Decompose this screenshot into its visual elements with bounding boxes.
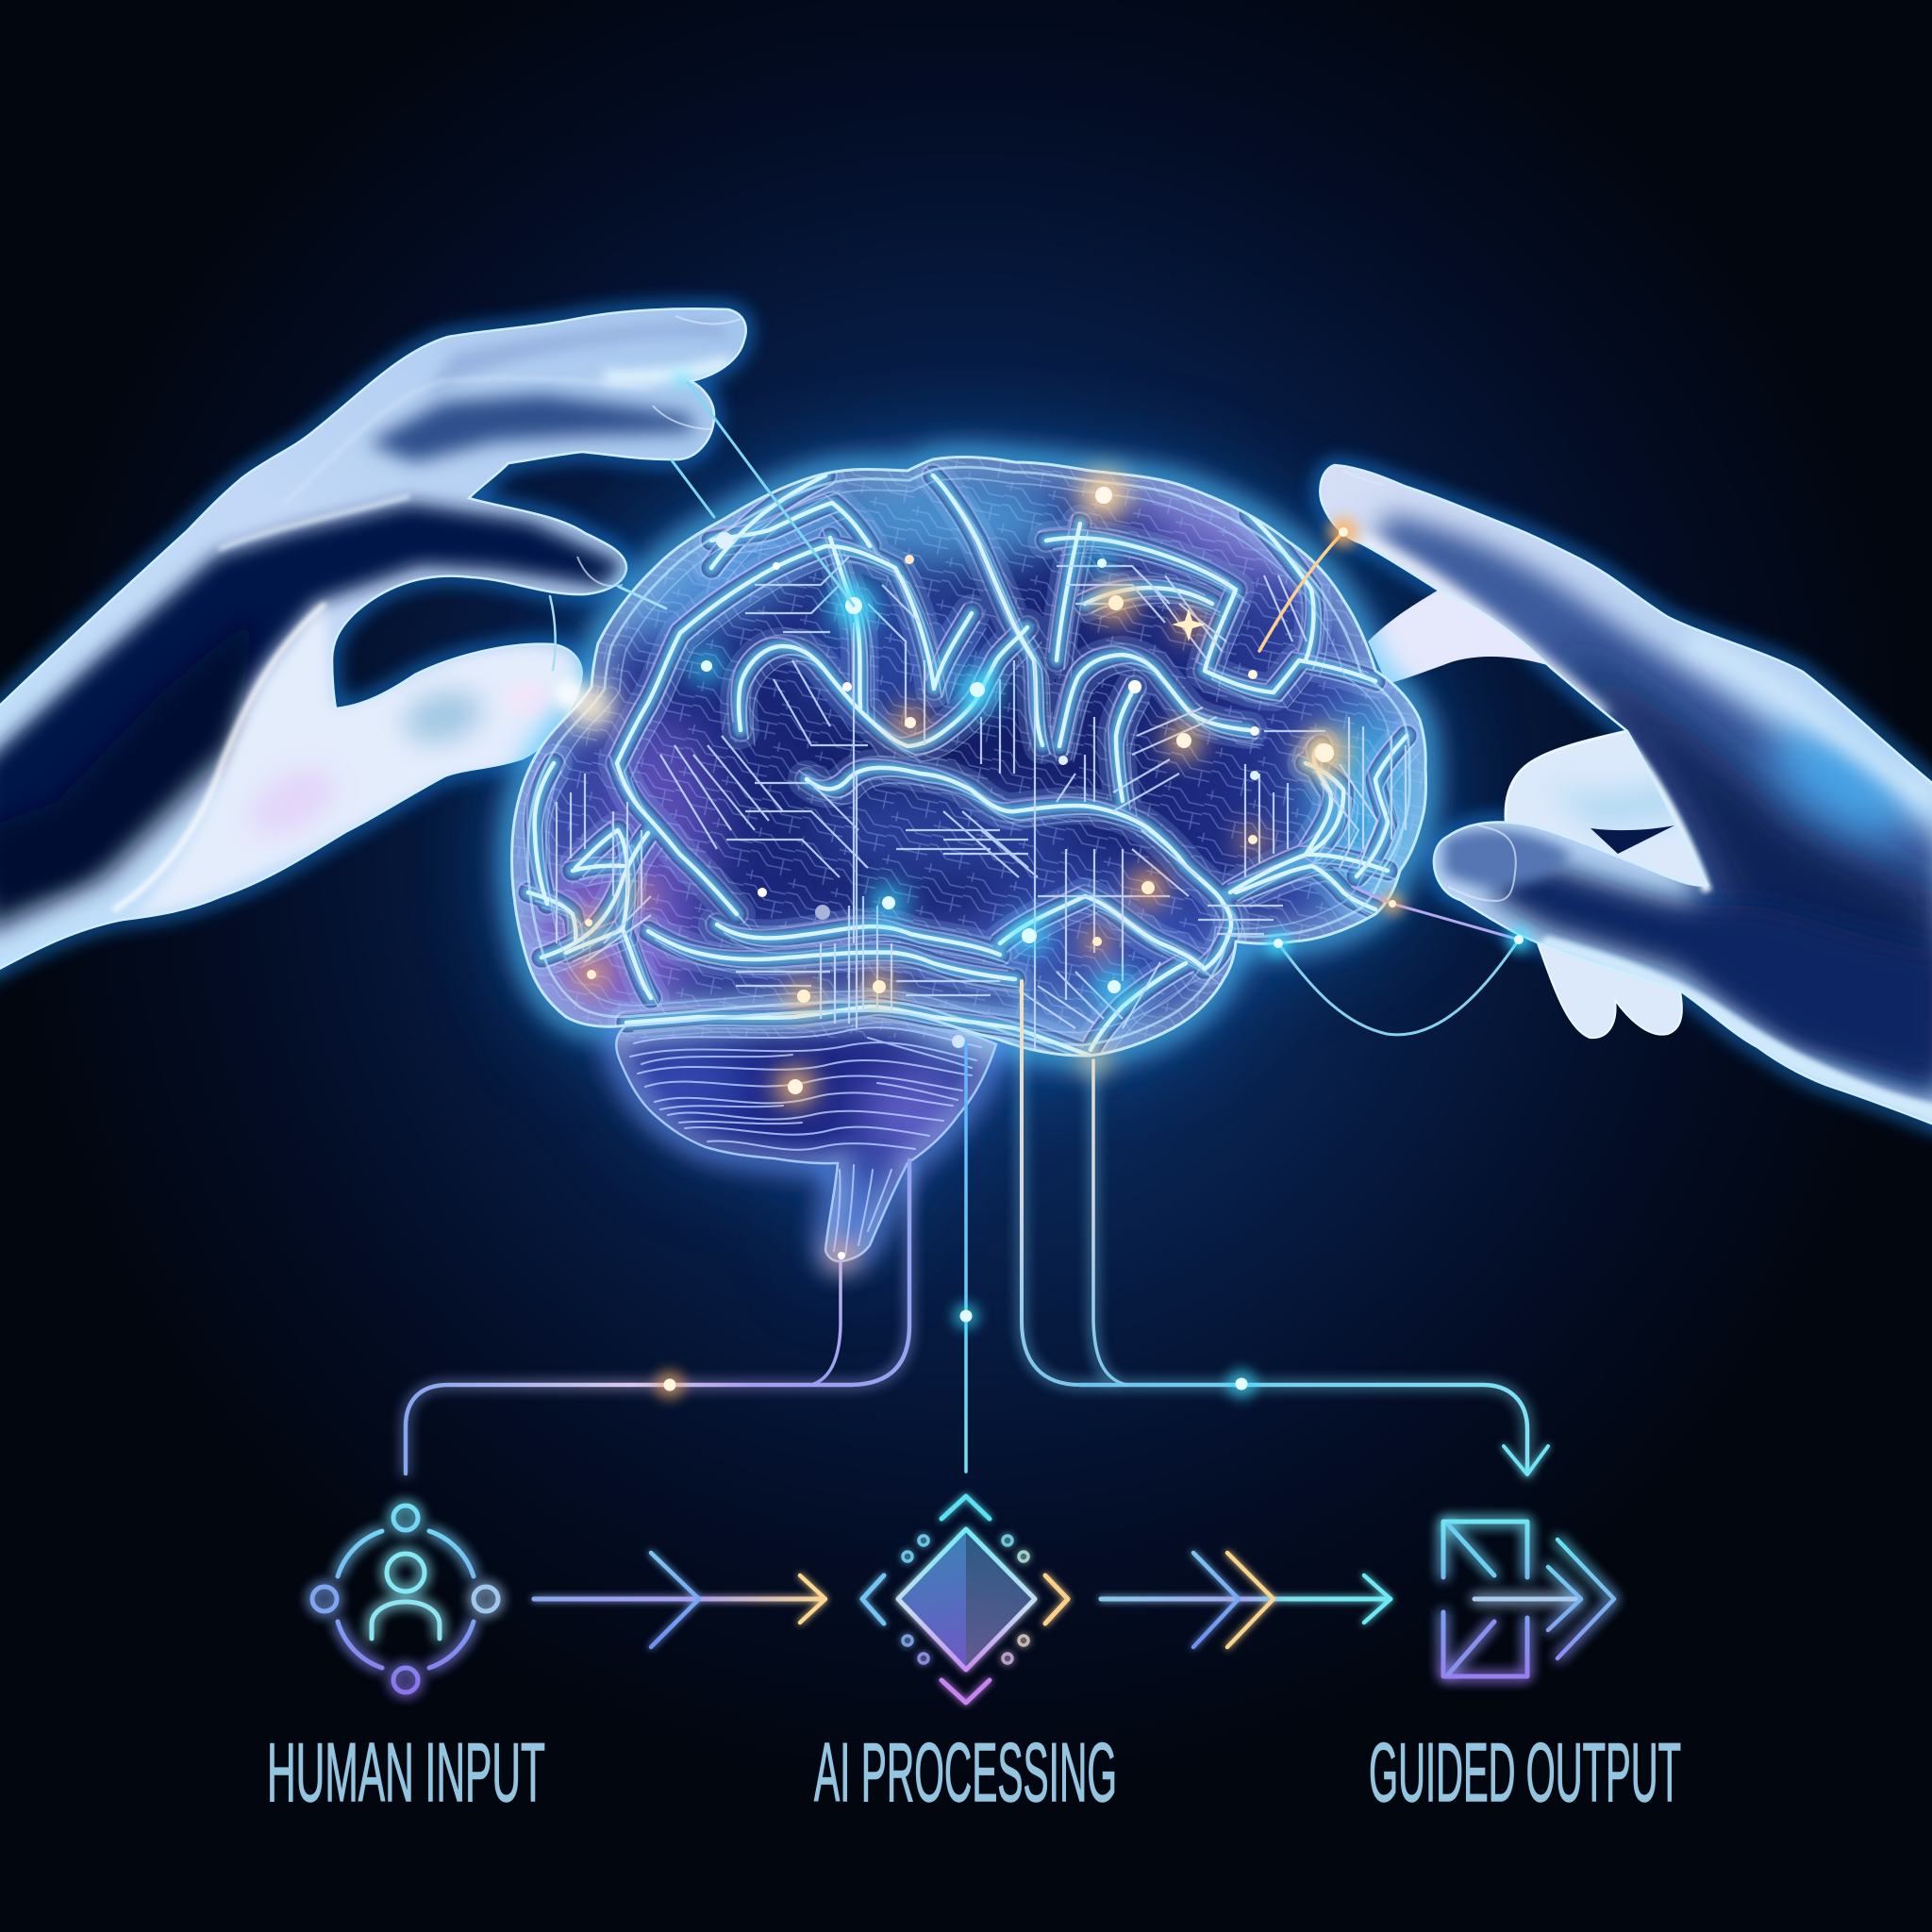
arrow: processing to output	[1101, 1553, 1391, 1647]
brain	[500, 453, 1443, 1274]
glassy inner contours	[527, 467, 1409, 1045]
glowing nodes	[570, 471, 1347, 1269]
shading: middle finger	[368, 394, 693, 462]
inner glow at rim	[512, 457, 1426, 1056]
cerebellum traces	[630, 1027, 981, 1255]
right merge line	[1022, 981, 1527, 1472]
text: HUMAN INPUT	[267, 1725, 545, 1819]
icon: human input	[312, 1506, 498, 1692]
circuit texture	[500, 453, 1443, 1038]
arrowhead into output	[1504, 1446, 1548, 1474]
sulci folds: nested strokes form parallel traces	[521, 467, 1421, 1071]
icon: AI processing diamond	[862, 1496, 1068, 1703]
strings from fingers to brain	[550, 370, 1531, 1035]
cerebellum	[616, 1010, 996, 1261]
icon: guided output	[1443, 1522, 1614, 1676]
cerebrum	[512, 457, 1426, 1056]
center line	[964, 1042, 968, 1472]
flow lines from brain to process	[406, 981, 1548, 1474]
circuit traces	[557, 557, 1406, 1057]
brain ambient glow	[512, 457, 1426, 1261]
flow nodes	[655, 1252, 1257, 1400]
fingernails	[577, 316, 741, 586]
thumbnail and fingernail	[1341, 470, 1516, 901]
right hand	[1320, 465, 1932, 1127]
text: AI PROCESSING	[814, 1725, 1117, 1819]
arrow: input to processing	[534, 1553, 825, 1647]
coloured tints inside brain	[519, 454, 1424, 1274]
shading: top finger	[425, 321, 731, 396]
left merge line	[406, 1160, 909, 1474]
left hand	[0, 308, 746, 974]
back fingers	[1368, 587, 1726, 1038]
shading: index finger, back of hand and thumb	[1377, 514, 1932, 1104]
shading: index finger and back of hand	[0, 503, 625, 896]
shading: palm and thumb	[132, 604, 585, 920]
